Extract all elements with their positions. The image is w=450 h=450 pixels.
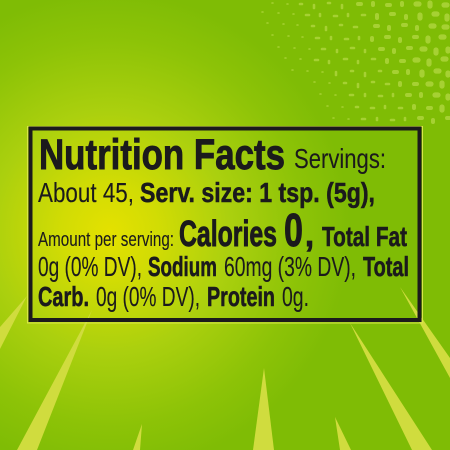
text: carb value: 0g (0% DV), bbox=[96, 281, 200, 312]
text: sodium value: 60mg (3% DV), bbox=[224, 251, 356, 282]
ray: small right of centre bbox=[335, 417, 351, 450]
text: amount per serving: Amount per serving: bbox=[38, 229, 174, 251]
text: protein value: 0g. bbox=[282, 281, 309, 312]
heading: Nutrition Facts: Nutrition Facts bbox=[39, 131, 285, 179]
ray: left long bbox=[17, 310, 92, 450]
text: protein label: Protein bbox=[207, 281, 275, 312]
text: calories value: 0 bbox=[284, 204, 303, 256]
ray: small left of centre bbox=[133, 424, 142, 450]
light rays bbox=[0, 287, 450, 450]
nutrition facts panel bbox=[28, 126, 422, 323]
panel border halo bbox=[28, 126, 422, 323]
text: servings line: Servings: bbox=[294, 143, 386, 174]
text: carb label: Carb. bbox=[38, 281, 89, 312]
text: total label: Total bbox=[363, 251, 409, 282]
text: calories label: Calories bbox=[179, 213, 277, 254]
text: sodium label: Sodium bbox=[148, 251, 217, 282]
text: calories comma: , bbox=[305, 216, 314, 253]
text: about 45 servings: About 45, bbox=[38, 177, 134, 208]
panel border bbox=[30, 128, 420, 320]
text: total fat value: 0g (0% DV), bbox=[38, 251, 142, 282]
ray: far right bbox=[400, 287, 450, 378]
halftone dots top right bbox=[262, 3, 449, 122]
text: total fat label: Total Fat bbox=[322, 221, 407, 252]
ray: centre bbox=[253, 368, 274, 450]
text: serving size: Serv. size: 1 tsp. (5g), bbox=[140, 177, 375, 208]
ray: right long bbox=[350, 323, 432, 450]
ray: far left bbox=[0, 296, 27, 349]
